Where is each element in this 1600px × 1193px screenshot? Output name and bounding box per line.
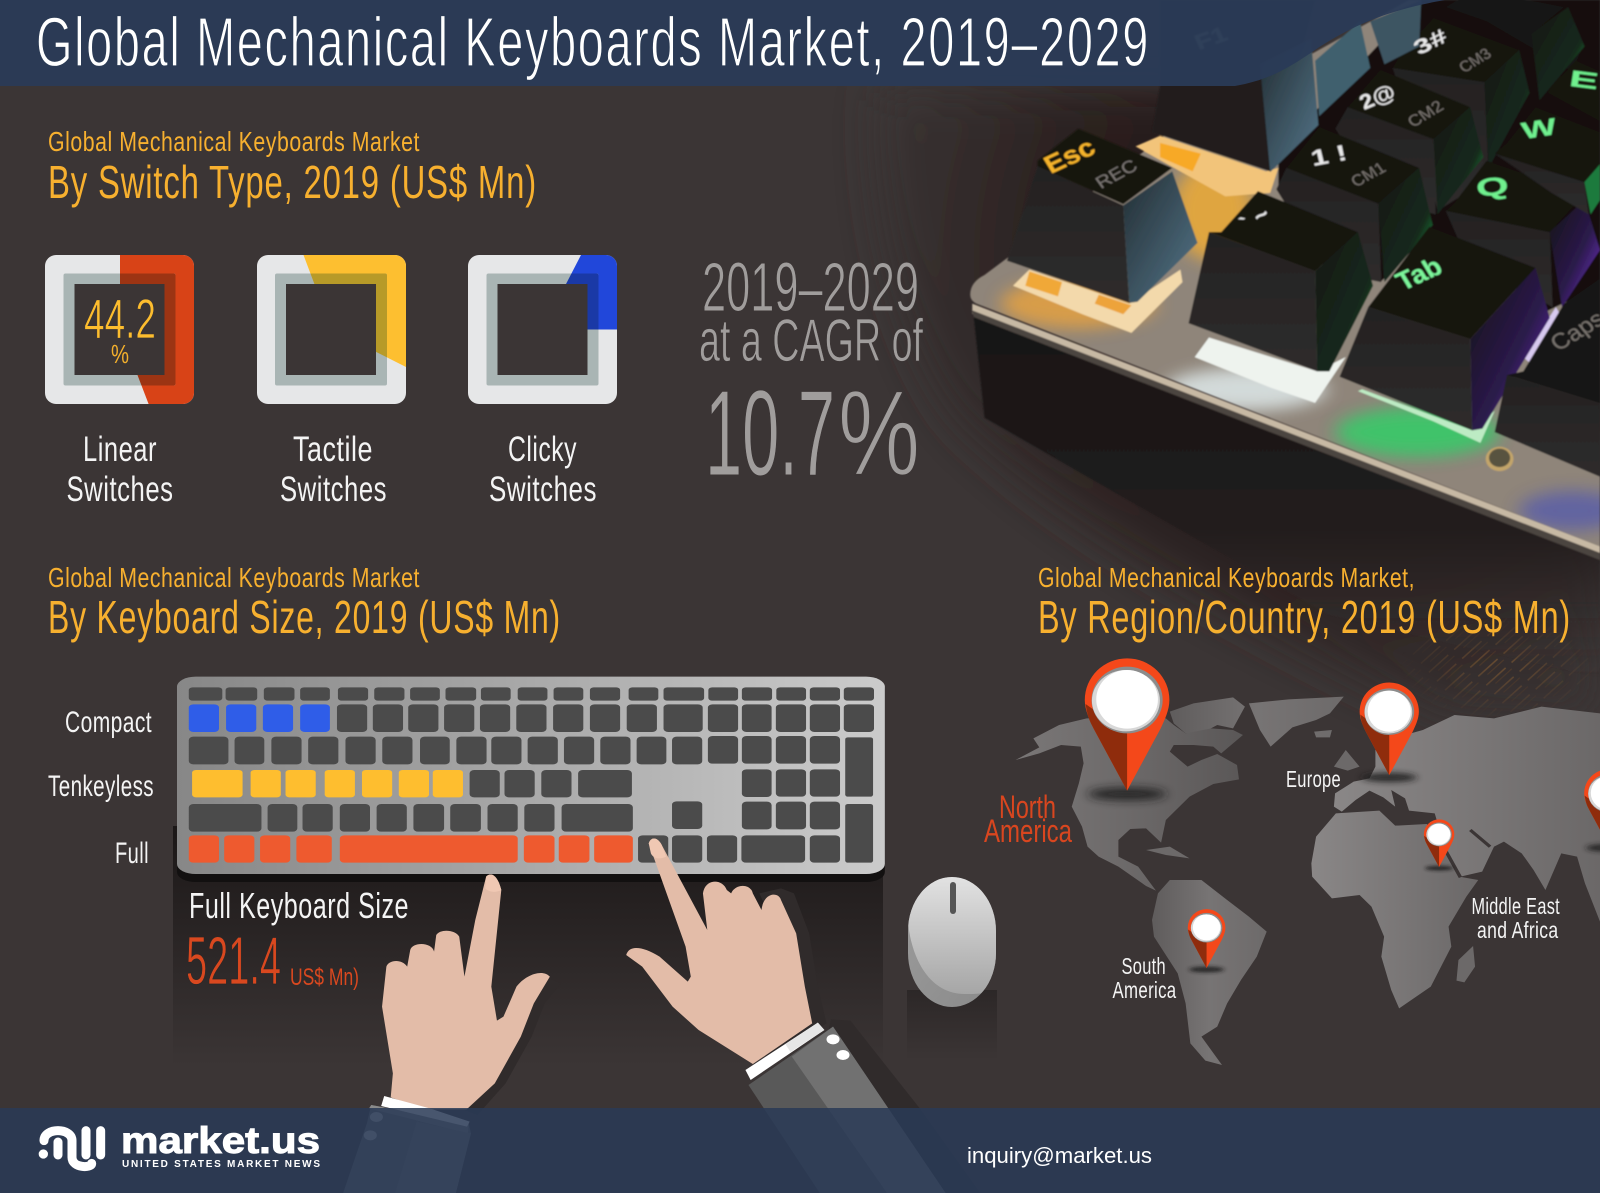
panel: tactile switches xyxy=(257,255,406,509)
photo: mechanical keyboard with RGB lighting: F1 xyxy=(1191,22,1231,54)
value: 44.2%: % xyxy=(111,339,129,369)
panel: clicky switches: Switches xyxy=(489,470,597,509)
callout: CAGR: % xyxy=(838,365,920,501)
icon: logo mark xyxy=(39,1131,101,1167)
photo: mechanical keyboard with RGB lighting: Tab xyxy=(1390,251,1447,296)
key legends: Esc xyxy=(1039,133,1101,179)
photo: mechanical keyboard with RGB lighting xyxy=(878,0,1600,720)
Greenland and arctic islands xyxy=(1170,697,1344,747)
photo: mechanical keyboard with RGB lighting: 3# xyxy=(1409,25,1452,59)
pin: Europe xyxy=(1360,682,1419,782)
panel: linear switches: Linear xyxy=(83,430,157,469)
photo: mechanical keyboard with RGB lighting: E xyxy=(1567,66,1600,95)
callout: full keyboard size: Full Keyboard Size xyxy=(189,885,409,926)
South America xyxy=(1152,880,1267,1065)
callout: CAGR: at a CAGR of xyxy=(699,307,923,374)
Tab key xyxy=(1340,307,1472,430)
value: 44.2% xyxy=(84,287,156,369)
North America xyxy=(1016,715,1243,891)
illustration: hands xyxy=(343,839,980,1193)
heading: keyboard size: By Keyboard Size, 2019 (US$ Mn) xyxy=(48,591,561,643)
panel: clicky switches: Clicky xyxy=(508,430,577,469)
label: South America: America xyxy=(1112,977,1176,1003)
label: Middle East and Africa: Middle East xyxy=(1472,893,1560,919)
heading: switch type: By Switch Type, 2019 (US$ Mn) xyxy=(48,156,537,208)
callout: full keyboard size xyxy=(186,885,409,999)
photo: mechanical keyboard with RGB lighting: 1 ! xyxy=(1308,140,1350,172)
left hand shadow xyxy=(460,978,561,1115)
Caps key xyxy=(1495,375,1600,477)
photo: mechanical keyboard with RGB lighting: CM1 xyxy=(1347,159,1389,191)
photo: mechanical keyboard with RGB lighting: CM3 xyxy=(1456,45,1495,76)
photo: mechanical keyboard with RGB lighting: Q xyxy=(1474,171,1511,203)
Red Sea and Persian Gulf xyxy=(1443,830,1490,877)
right sleeve xyxy=(745,1023,946,1193)
logo: market.us: UNITED STATES MARKET NEWS xyxy=(122,1159,320,1170)
Eurasia xyxy=(1334,707,1600,922)
photo: mechanical keyboard with RGB lighting: 2@ xyxy=(1355,80,1400,114)
photo: mechanical keyboard with RGB lighting: CM2 xyxy=(1404,97,1447,131)
Caribbean xyxy=(1146,847,1190,858)
callout: CAGR: 10.7 xyxy=(705,365,835,501)
label: North America xyxy=(984,789,1072,849)
tenkeyless row keys: yellow highlight xyxy=(192,770,463,797)
right sleeve shadow xyxy=(820,1019,980,1193)
shadow panel under keyboard xyxy=(173,826,883,1066)
photo: mechanical keyboard with RGB lighting: W xyxy=(1519,114,1559,145)
heading: switch type xyxy=(48,126,537,208)
left sleeve xyxy=(343,1096,471,1193)
panel: tactile switches: Tactile xyxy=(293,430,373,469)
header band xyxy=(0,0,1445,86)
label: North America: North xyxy=(999,789,1056,825)
label: compact: Compact xyxy=(65,706,152,739)
photo: mechanical keyboard with RGB lighting: REC xyxy=(1091,155,1141,192)
map: world xyxy=(1016,658,1600,1065)
callout: full keyboard size: 521.4 xyxy=(186,923,281,999)
function row xyxy=(189,687,874,701)
callout: CAGR: 2019–2029 xyxy=(702,248,919,326)
tilde key xyxy=(1189,232,1317,371)
dark keys xyxy=(189,704,874,863)
heading: keyboard size xyxy=(48,562,561,643)
heading: keyboard size: Global Mechanical Keyboards Market xyxy=(48,562,420,593)
full row keys: red highlight xyxy=(189,835,633,863)
panel: tactile switches: Switches xyxy=(280,470,387,509)
right hand xyxy=(626,839,812,1064)
screw xyxy=(1486,447,1513,471)
pin: Asia xyxy=(1584,769,1600,852)
callout: full keyboard size: US$ Mn) xyxy=(290,964,359,991)
panel: linear switches: Switches xyxy=(66,470,174,509)
label: tenkeyless: Tenkeyless xyxy=(48,770,154,803)
keyboard illustration xyxy=(177,677,885,882)
label: full: Full xyxy=(115,837,149,870)
panel: clicky switches xyxy=(468,255,617,509)
pin: Middle East and Africa xyxy=(1424,819,1454,871)
heading: region xyxy=(1038,562,1571,643)
logo: market.us xyxy=(39,1120,320,1170)
label: Europe: Europe xyxy=(1286,766,1341,792)
callout: CAGR xyxy=(699,248,923,501)
right hand shadow xyxy=(759,888,827,1063)
UK, Madagascar xyxy=(1334,750,1475,982)
label: South America: South xyxy=(1122,953,1166,979)
pin: South America xyxy=(1188,909,1225,972)
key row behind xyxy=(1446,0,1584,71)
heading: switch type: Global Mechanical Keyboards Market xyxy=(48,126,420,157)
Esc key xyxy=(1007,166,1129,303)
compact row keys: blue highlight xyxy=(189,704,330,732)
label: North America: America xyxy=(984,813,1072,849)
footer band xyxy=(0,1108,1600,1193)
left hand xyxy=(382,874,550,1109)
panel: linear switches xyxy=(45,255,194,509)
Q W E xyxy=(1446,211,1553,307)
heading: region: Global Mechanical Keyboards Market, xyxy=(1038,562,1415,593)
label: Middle East and Africa xyxy=(1472,893,1560,943)
pin: North America xyxy=(1085,658,1169,801)
label: South America xyxy=(1112,953,1176,1003)
icon: mouse xyxy=(907,877,997,1022)
Africa xyxy=(1311,811,1478,1008)
logo: market.us: market.us xyxy=(121,1120,320,1161)
contact email: inquiry@market.us xyxy=(967,1143,1152,1168)
label: Middle East and Africa: and Africa xyxy=(1477,917,1558,943)
photo: mechanical keyboard with RGB lighting: ` ~ xyxy=(1235,201,1275,236)
value: 44.2%: 44.2 xyxy=(84,287,156,350)
